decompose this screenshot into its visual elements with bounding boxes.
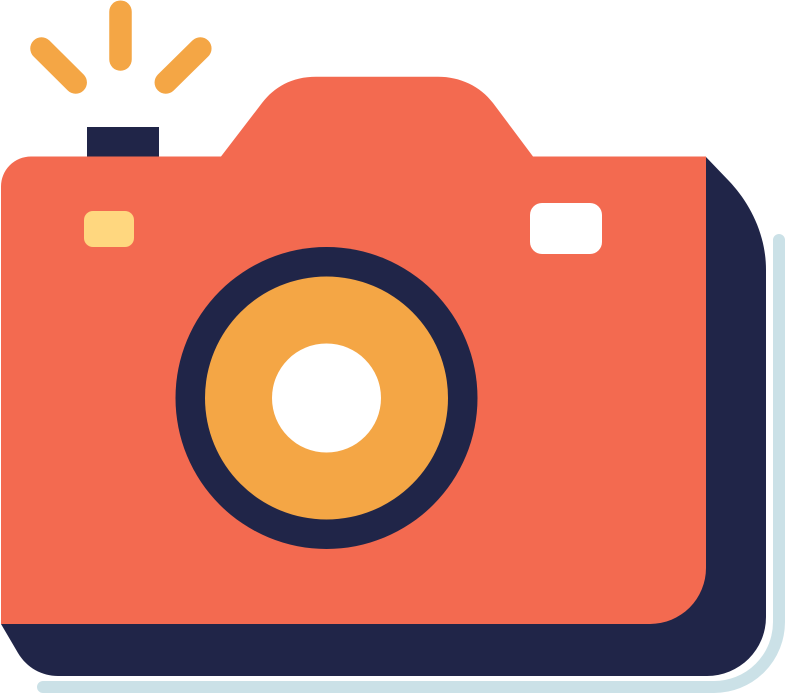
ray right xyxy=(166,48,200,82)
lens orange ring xyxy=(205,276,448,520)
light blue outline shadow xyxy=(43,240,779,687)
white viewfinder xyxy=(530,203,602,254)
flash rays xyxy=(42,12,200,83)
lens outer ring xyxy=(176,247,478,549)
ray left xyxy=(42,48,76,82)
ray centre xyxy=(109,12,132,59)
yellow indicator light xyxy=(84,211,134,247)
camera body xyxy=(1,77,706,624)
navy camera side depth xyxy=(1,157,766,676)
lens white centre xyxy=(272,344,381,452)
flash hot shoe xyxy=(87,127,159,167)
